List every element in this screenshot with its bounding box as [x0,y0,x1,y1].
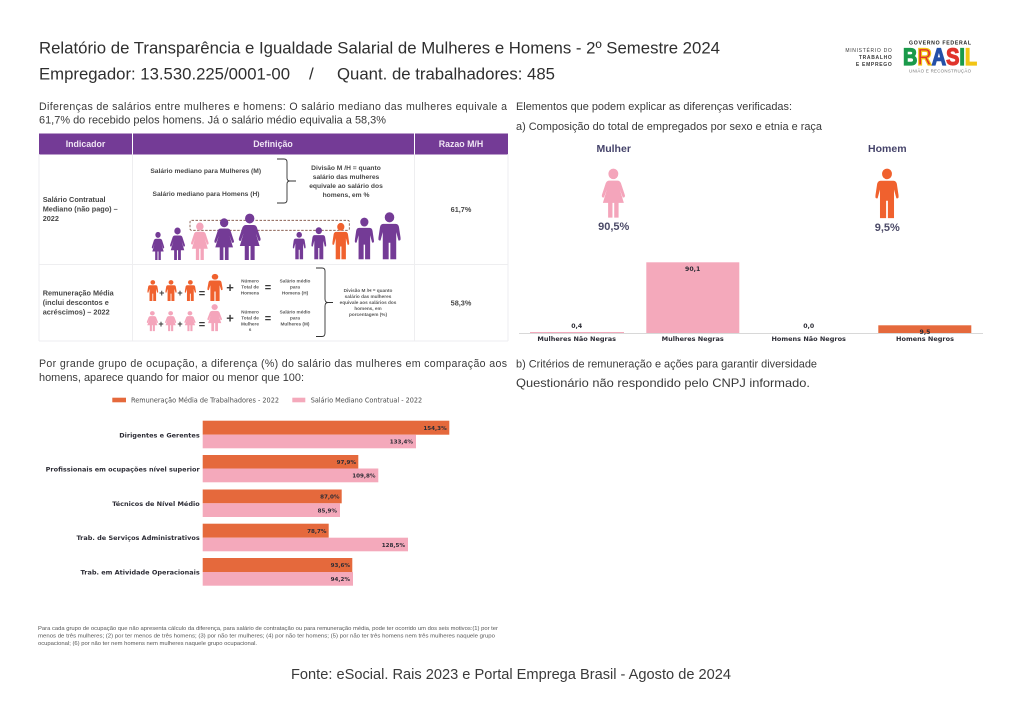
row 2 label: (inclui descontos e [43,298,109,307]
bar chart: composição por sexo e raça: Mulheres Negras [662,335,724,343]
ilustração: mulheres [152,214,261,260]
logo: ministério e governo federal: E EMPREGO [856,62,892,68]
title: Empregador: 13.530.225/0001-00 [39,64,290,83]
row 1 label [43,195,118,223]
text block: elementos explicativos: Elementos que podem explicar as diferenças verificadas: [516,101,792,113]
row 2 label: Remuneração Média [43,288,115,298]
bar chart: diferença por grupo de ocupação: 154,3% [423,426,447,432]
ícones: soma homens: Salário médio [280,278,311,284]
text block: grande grupo de ocupação [39,358,507,384]
title: Quant. de trabalhadores: 485 [337,64,555,83]
bar chart: composição por sexo e raça [519,262,983,343]
bar chart: composição por sexo e raça: Mulheres Não Negras [537,335,616,343]
logo: ministério e governo federal: TRABALHO [859,55,892,61]
bar chart: composição por sexo e raça: 9,5 [920,329,930,336]
panel: tabela de indicadores [39,134,508,341]
fonte: Fonte: eSocial. Rais 2023 e Portal Emprega Brasil - Agosto de 2024 [291,667,731,683]
ícones: soma mulheres: Salário médio [280,310,311,314]
bar chart: diferença por grupo de ocupação: Dirigentes e Gerentes [119,431,200,439]
footnote: ocupacional; (6) por não ter nem homens nem mulheres naquele grupo ocupacional. [38,641,257,647]
bar chart: diferença por grupo de ocupação: 78,7% [307,529,327,535]
panel: mulher: Mulher [596,143,631,155]
ícones: soma mulheres: + [177,319,183,329]
text block: diferenças de salários [39,101,507,126]
caixa tracejada [190,220,349,230]
panel: mulher [596,143,631,233]
ícones: soma mulheres: Mulheres (M) [281,322,310,326]
text block: critérios de remuneração: Questionário não respondido pelo CNPJ informado. [516,376,810,390]
bar chart: composição por sexo e raça: 90,1 [685,266,700,273]
chave e definição: equivale aos salários dos [340,300,397,305]
ícones: soma homens: = [199,288,205,300]
definição salário mediano: salário das mulheres [313,174,380,181]
logo: ministério e governo federal: BRASIL [903,44,977,71]
ícones: soma mulheres: Mulhere [241,322,259,326]
table header: Definição [253,139,293,149]
definição salário mediano: Salário mediano para Mulheres (M) [150,168,261,175]
ícones: soma mulheres: s [249,327,252,332]
text block: critérios de remuneração: b) Critérios de remuneração e ações para garantir diversidade [516,359,817,371]
text block: elementos explicativos: a) Composição do total de empregados por sexo e etnia e raça [516,121,822,133]
ícones: soma mulheres: + [226,310,234,326]
bar chart: diferença por grupo de ocupação: 133,4% [390,440,413,446]
bar chart: diferença por grupo de ocupação: Profissionais em ocupações nível superior [46,465,200,473]
bar chart: composição por sexo e raça: 0,4 [571,323,583,330]
title: Relatório de Transparência e Igualdade Salarial de Mulheres e Homens - 2º Semestre 2024 [39,38,720,58]
text block: grande grupo de ocupação: Por grande grupo de ocupação, a diferença (%) do salário das mulheres em comparação aos [39,358,507,370]
bar chart: diferença por grupo de ocupação: 93,6% [331,563,350,569]
logo: ministério e governo federal: MINISTÉRIO DO [845,47,892,54]
definição salário mediano: Divisão M /H = quanto [311,165,381,172]
ícones: soma mulheres: Total de [241,316,259,320]
row 2 label [43,288,115,317]
bar chart: composição por sexo e raça: 0,0 [803,323,815,330]
text block: critérios de remuneração [516,359,817,390]
title: / [309,64,314,83]
logo: ministério e governo federal: UNIÃO E RECONSTRUÇÃO [909,68,972,74]
ícones: soma homens: + [177,288,183,298]
bar chart: diferença por grupo de ocupação: 109,8% [352,474,376,480]
footnote: Para cada grupo de ocupação que não apresenta cálculo da diferença, para salário de contratação ou para remuneração média, pode ter ocorrido um dos seis motivos:(1) por ter [38,626,498,632]
panel: mulher: 90,5% [598,221,630,233]
icon: homem [875,169,899,218]
table header [39,134,508,154]
definição salário mediano [150,159,383,203]
row 1 label: Salário Contratual [43,195,106,204]
bar chart: diferença por grupo de ocupação: 94,2% [331,577,350,583]
legend: Remuneração Média de Trabalhadores - 2022 [131,396,279,404]
bar chart: diferença por grupo de ocupação: 87,0% [320,494,340,500]
definição salário mediano: homens, em % [323,192,369,199]
ícones: soma homens: + [226,280,234,295]
ícones: soma homens: Número [241,278,259,284]
bar chart: diferença por grupo de ocupação: Trab. de Serviços Administrativos [76,534,200,542]
bar chart: diferença por grupo de ocupação: Técnicos de Nível Médio [112,500,200,508]
chave e definição: Divisão M /H = quanto [344,288,393,293]
row 2 label: acréscimos) – 2022 [43,308,110,317]
chave e definição: salário das mulheres [345,294,392,299]
ícones: soma homens: + [159,288,164,298]
ícones: soma homens: Homens [241,290,260,296]
bar chart: composição por sexo e raça: Homens Negros [896,335,954,343]
bar chart: diferença por grupo de ocupação: 97,9% [337,460,356,466]
legend: Salário Mediano Contratual - 2022 [311,396,422,404]
panel: homem [868,143,907,234]
ícones: soma homens: Total de [241,284,259,290]
title [39,38,720,83]
ícones: soma homens [147,274,311,301]
valor 58,3%: 58,3% [451,298,472,308]
ícones: soma homens: Homens (H) [282,290,309,296]
valor 61,7%: 61,7% [451,205,472,214]
row 1 label: Mediano (não pago) – [43,204,118,214]
bar chart: composição por sexo e raça: Homens Não Negros [771,335,846,343]
chave e definição [316,268,397,336]
table header: Razao M/H [439,139,483,149]
logo: ministério e governo federal [845,40,977,74]
ícones: soma mulheres: + [158,319,164,329]
panel: homem: Homem [868,143,907,155]
chave e definição: homens, em [354,306,382,311]
row 1 label: 2022 [43,214,59,223]
text block: diferenças de salários: 61,7% do recebido pelos homens. Já o salário médio equivalia a 58,3% [39,114,387,126]
bar chart: diferença por grupo de ocupação [46,421,449,586]
ícones: soma mulheres [147,304,311,332]
text block: grande grupo de ocupação: homens, aparece quando for maior ou menor que 100: [39,372,304,384]
chave e definição: porcentagem (%) [349,312,387,317]
text block: diferenças de salários: Diferenças de salários entre mulheres e homens: O salário mediano das mulheres equivale a [39,101,507,113]
table header: Indicador [66,139,106,149]
bar chart: diferença por grupo de ocupação: Trab. em Atividade Operacionais [81,568,200,576]
bar chart: diferença por grupo de ocupação: 85,9% [318,508,337,514]
ícones: soma homens: = [265,282,271,294]
icon: mulher [602,169,625,218]
ícones: soma mulheres: = [265,313,271,325]
bar chart: diferença por grupo de ocupação: 128,5% [382,543,405,549]
ícones: soma mulheres: para [290,316,300,320]
logo: ministério e governo federal: GOVERNO FEDERAL [909,40,972,46]
footnote: menos de três mulheres; (2) por ter menos de três homens; (3) por não ter mulheres; (4) por não ter homens; (5) por não ter três homens nem três mulheres naquele grupo [38,634,495,640]
legend [112,396,422,404]
text block: elementos explicativos [516,101,822,133]
ilustração: homens [293,212,401,259]
definição salário mediano: Salário mediano para Homens (H) [152,191,260,198]
ícones: soma mulheres: = [199,319,205,331]
panel: homem: 9,5% [875,222,900,234]
definição salário mediano: equivale ao salário dos [309,183,383,190]
footnote [38,626,498,647]
ícones: soma homens: para [290,284,300,290]
ícones: soma mulheres: Número [241,310,259,314]
